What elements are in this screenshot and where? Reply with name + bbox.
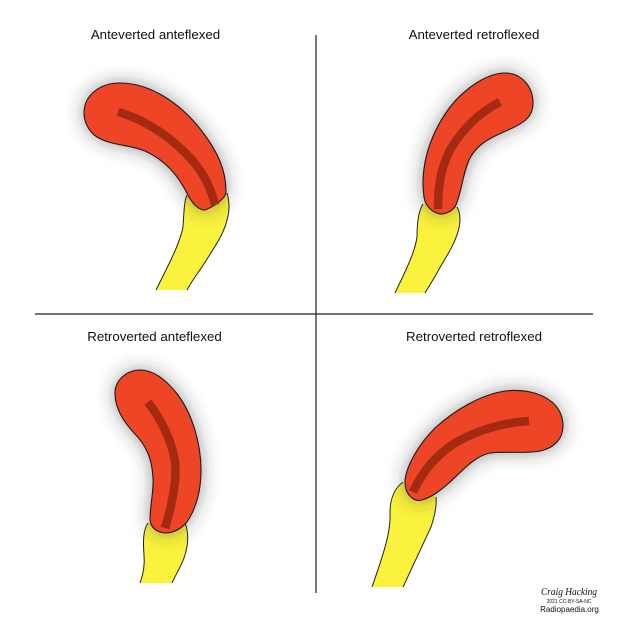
uterine cavity <box>438 102 500 209</box>
vertical axis line <box>315 35 317 593</box>
panel: retroverted retroflexed <box>372 329 563 587</box>
uterine cavity <box>118 112 215 205</box>
panel: retroverted anteflexed <box>87 329 222 583</box>
signature: Craig Hacking <box>541 587 597 598</box>
cervix <box>395 204 460 293</box>
uterus body <box>115 370 201 533</box>
cervix <box>372 482 436 587</box>
uterine cavity <box>413 421 529 492</box>
uterine cavity <box>148 402 175 528</box>
horizontal axis line <box>35 313 593 315</box>
heading: retroverted anteflexed: Retroverted anteflexed <box>87 329 222 344</box>
licence: 2021 CC-BY-SA-NC <box>547 599 592 605</box>
uterus body <box>423 73 533 214</box>
uterus body <box>84 83 226 210</box>
heading: retroverted retroflexed: Retroverted retroflexed <box>406 329 542 344</box>
website: Radiopaedia.org <box>540 605 599 614</box>
cervix <box>156 193 229 290</box>
heading: anteverted retroflexed: Anteverted retroflexed <box>409 27 539 42</box>
uterus body <box>405 390 563 500</box>
panel: anteverted anteflexed <box>84 27 229 290</box>
panel: anteverted retroflexed <box>395 27 539 293</box>
heading: anteverted anteflexed: Anteverted anteflexed <box>91 27 220 42</box>
credit block <box>540 587 599 614</box>
cervix <box>140 523 188 583</box>
